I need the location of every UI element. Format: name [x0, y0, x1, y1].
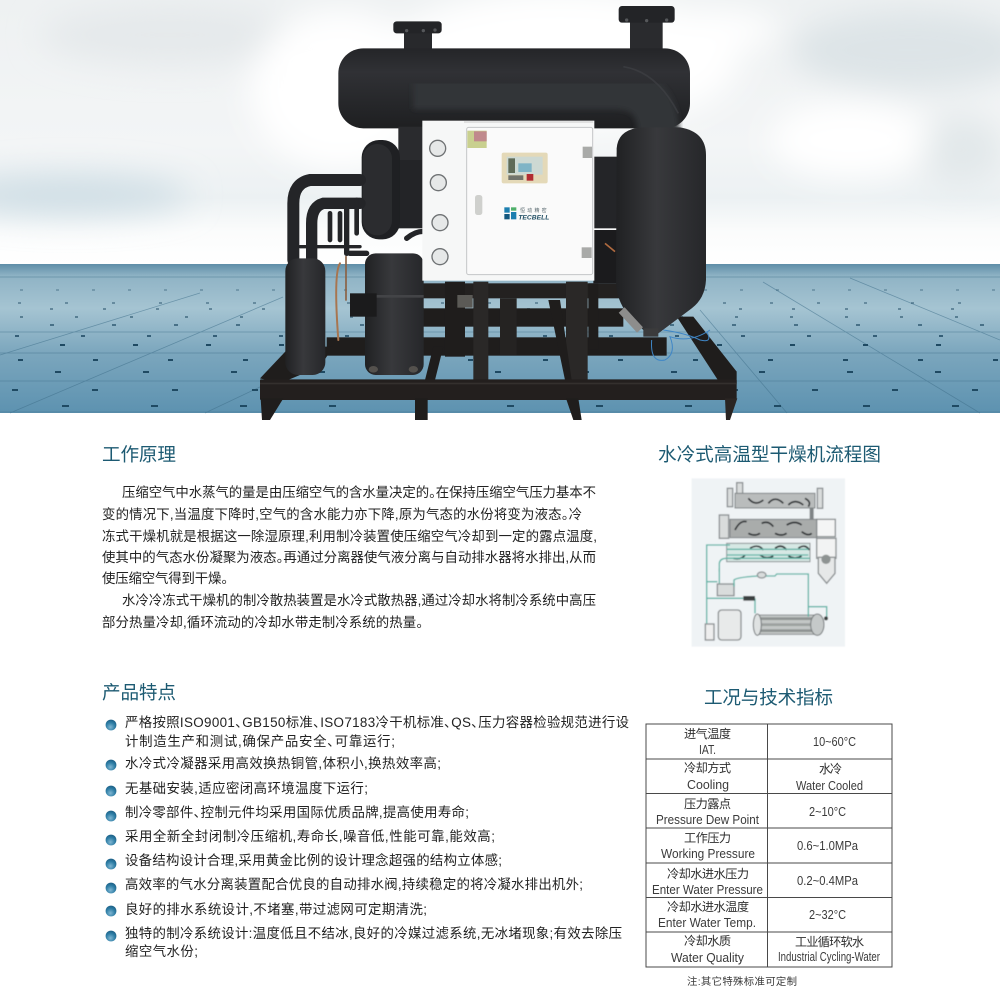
drain tubing	[651, 330, 710, 360]
row: enter water pressure: 冷却水进水压力	[667, 867, 749, 881]
text block: working principle: 部分热量冷却,循环流动的冷却水带走制冷系统的热量。	[102, 615, 423, 630]
compressor	[350, 253, 424, 375]
row: enter water temperature: 冷却水进水温度	[667, 899, 749, 914]
heading: technical specifications: 工况与技术指标	[704, 687, 833, 708]
left end cylinder	[362, 127, 425, 239]
row: working pressure: 0.6~1.0MPa	[797, 839, 858, 853]
text block: working principle: 变的情况下,当温度下降时,空气的含水能力亦下降,原为气态的水份将变为液态。冷	[102, 507, 582, 522]
refrigerant pipes	[293, 180, 427, 340]
row: water quality: Water Quality	[671, 951, 745, 965]
row: cooling: Cooling	[687, 778, 729, 792]
row: intake temperature: 10~60°C	[813, 735, 856, 749]
list item 2: 水冷式冷凝器采用高效换热铜管,体积小,换热效率高;	[125, 755, 441, 771]
list item 9: 独特的制冷系统设计:温度低且不结冰,良好的冷媒过滤系统,无冰堵现象;有效去除压	[125, 926, 622, 941]
row: enter water temperature: Enter Water Temp.	[658, 916, 756, 930]
row: intake temperature	[684, 726, 856, 757]
specifications table	[646, 724, 892, 967]
TECBELL logo: TECBELL	[518, 214, 549, 221]
bullet list: product features	[106, 714, 629, 959]
row: pressure dew point: Pressure Dew Point	[656, 813, 759, 827]
table grid	[646, 724, 892, 967]
condenser	[753, 614, 824, 635]
heading: working principle: 工作原理	[102, 444, 176, 465]
list item 9	[106, 926, 622, 959]
row: enter water pressure: 0.2~0.4MPa	[797, 874, 858, 888]
TECBELL logo: 恒动精密	[520, 207, 547, 214]
row: enter water temperature: 2~32°C	[809, 908, 846, 922]
product photo: water-cooled air dryer	[260, 6, 737, 420]
text block: working principle: 水冷冷冻式干燥机的制冷散热装置是水冷式散热器,通过冷却水将制冷系统中高压	[122, 592, 596, 608]
row: cooling: 冷却方式	[684, 760, 731, 775]
list item 3: 无基础安装,适应密闭高环境温度下运行;	[125, 780, 368, 796]
heading: flow diagram: 水冷式高温型干燥机流程图	[658, 444, 881, 465]
list item 1	[106, 714, 629, 749]
row: cooling: Water Cooled	[796, 779, 863, 793]
row: enter water pressure	[652, 867, 858, 897]
list item 4: 制冷零部件、控制元件均采用国际优质品牌,提高使用寿命;	[125, 804, 469, 820]
list item 1: 严格按照ISO9001、GB150标准、ISO7183冷干机标准、QS、压力容器检验规范进行设	[125, 714, 629, 730]
row: working pressure: Working Pressure	[661, 847, 755, 861]
row: intake temperature: IAT.	[699, 743, 716, 757]
valve box	[457, 295, 473, 308]
top flanges	[393, 6, 675, 50]
row: water quality: 工业循环软水	[795, 935, 864, 949]
row: pressure dew point	[656, 797, 846, 827]
separator vessel	[616, 127, 706, 337]
list item 7: 高效率的气水分离装置配合优良的自动排水阀,持续稳定的将冷凝水排出机外;	[125, 876, 583, 892]
heading: product features: 产品特点	[102, 682, 176, 703]
TECBELL logo	[504, 207, 549, 221]
tiled floor	[0, 264, 1000, 413]
row: working pressure	[661, 831, 858, 861]
list item 1: 计制造生产和测试,确保产品安全、可靠运行;	[125, 733, 395, 749]
display panel	[502, 153, 548, 183]
flow diagram	[692, 478, 845, 647]
text block: working principle	[102, 484, 597, 630]
table footnote: 注:其它特殊标准可定制	[687, 975, 797, 988]
row: enter water temperature	[658, 899, 846, 930]
list item 9: 缩空气水份;	[125, 944, 198, 959]
row: cooling	[684, 760, 863, 793]
elbow pipe	[413, 88, 658, 133]
row: enter water pressure: Enter Water Pressure	[652, 883, 763, 897]
text block: working principle: 冻式干燥机就是根据这一除湿原理,利用制冷装置使压缩空气冷却到一定的露点温度,	[102, 528, 597, 544]
text block: working principle: 使其中的气态水份凝聚为液态。再通过分离器使气液分离与自动排水器将水排出,从而	[102, 549, 596, 565]
text block: working principle: 使压缩空气得到干燥。	[102, 570, 228, 586]
warning label	[467, 131, 487, 148]
text block: working principle: 压缩空气中水蒸气的量是由压缩空气的含水量决定的。在保持压缩空气压力基本不	[122, 484, 596, 500]
main horizontal tank	[338, 48, 690, 128]
row: water quality: 冷却水质	[684, 934, 731, 948]
row: water quality: Industrial Cycling-Water	[778, 950, 880, 964]
white control cabinet	[422, 121, 594, 281]
row: pressure dew point: 压力露点	[684, 797, 731, 811]
sky background with clouds	[0, 0, 1000, 264]
row: pressure dew point: 2~10°C	[809, 805, 846, 819]
accumulator	[285, 258, 325, 375]
gauges	[430, 140, 448, 265]
right side cylinder behind cabinet	[593, 157, 620, 228]
list item 8: 良好的排水系统设计,不堵塞,带过滤网可定期清洗;	[125, 901, 427, 917]
row: intake temperature: 进气温度	[684, 726, 731, 741]
row: working pressure: 工作压力	[684, 831, 731, 845]
list item 5: 采用全新全封闭制冷压缩机,寿命长,噪音低,性能可靠,能效高;	[125, 828, 495, 844]
steel frame	[260, 282, 737, 420]
row: cooling: 水冷	[819, 762, 842, 776]
row: water quality	[671, 934, 880, 965]
list item 6: 设备结构设计合理,采用黄金比例的设计理念超强的结构立体感;	[125, 852, 502, 868]
